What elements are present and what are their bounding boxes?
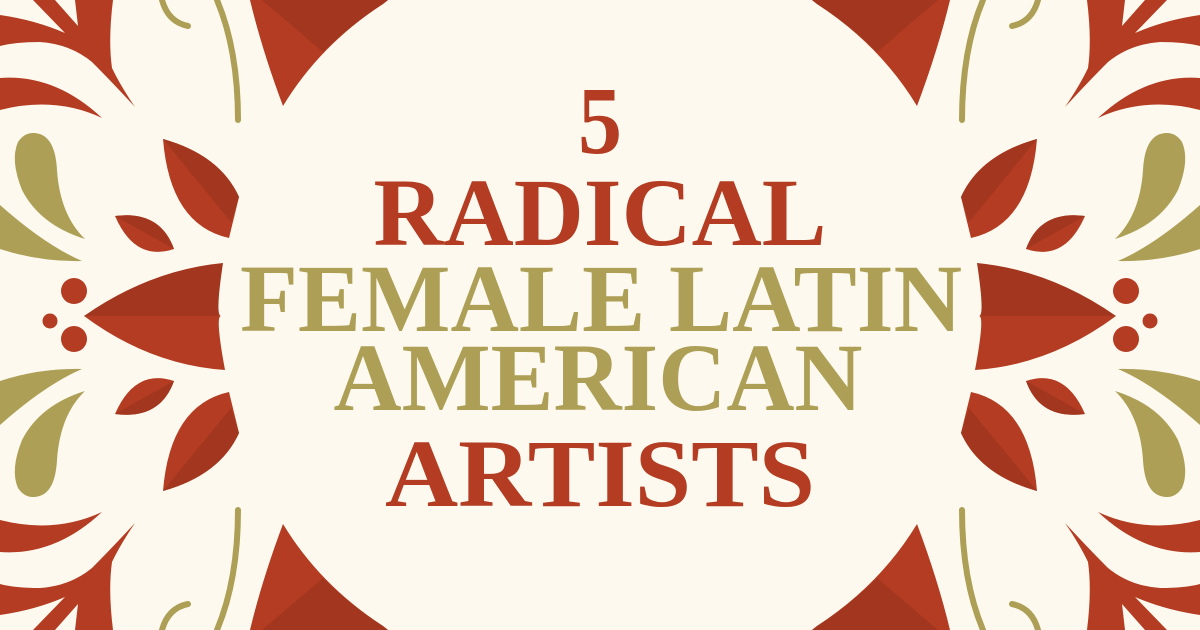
title: FEMALE LATIN bbox=[240, 245, 962, 352]
title: AMERICAN bbox=[334, 324, 862, 431]
title: RADICAL bbox=[374, 159, 826, 266]
title: 5 bbox=[578, 67, 622, 174]
decoration: left bbox=[0, 0, 388, 630]
title bbox=[240, 67, 962, 527]
small dot bbox=[42, 314, 58, 328]
decoration: right bbox=[812, 0, 1200, 630]
arrow bbox=[84, 263, 223, 316]
title: ARTISTS bbox=[385, 420, 815, 527]
